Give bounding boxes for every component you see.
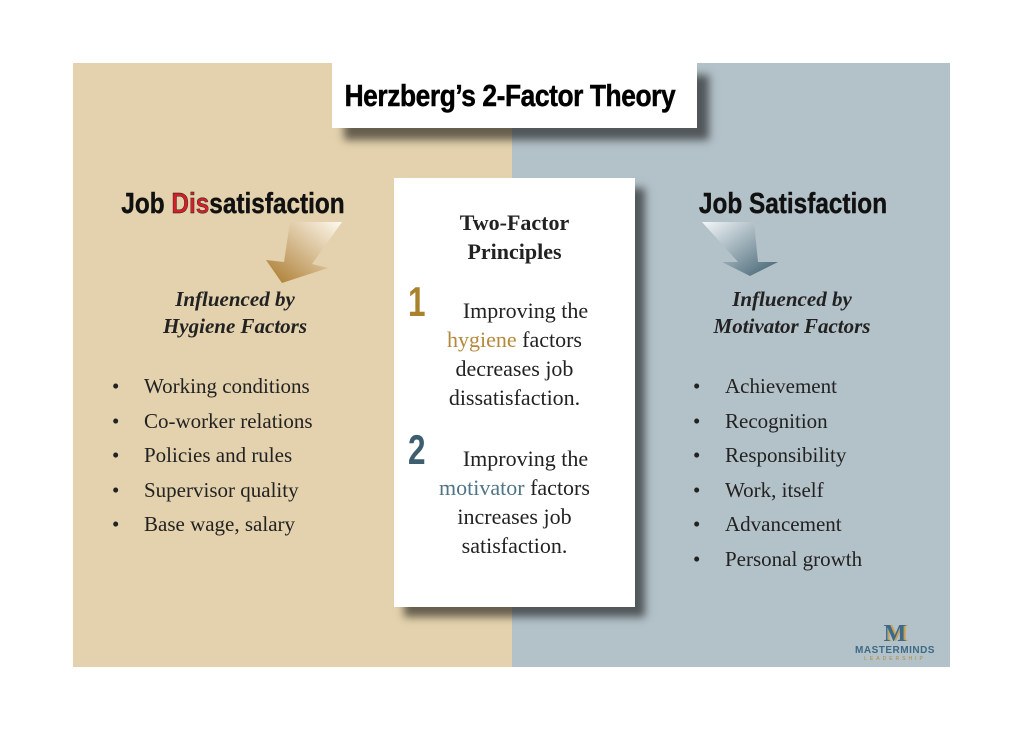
- principle 2: Improving the: [463, 446, 588, 471]
- list: motivator factors: Achievement: [725, 374, 837, 398]
- list: motivator factors: [694, 374, 862, 570]
- logo: masterminds leadership: MASTERMINDS: [855, 645, 935, 656]
- panel: left background: [73, 63, 512, 667]
- principle 1: [408, 278, 588, 410]
- text: influenced by hygiene: Influenced by: [175, 287, 295, 311]
- list: motivator factors: Recognition: [725, 408, 828, 432]
- list: hygiene factors: Co-worker relations: [144, 408, 313, 432]
- title: Herzberg’s 2-Factor Theory: [345, 78, 675, 113]
- text: influenced by motivator: Influenced by: [732, 287, 852, 311]
- principle 1: decreases job: [456, 356, 573, 381]
- text: influenced by motivator: Motivator Factors: [714, 314, 870, 338]
- list: hygiene factors: Policies and rules: [144, 443, 292, 467]
- logo: masterminds leadership: M: [884, 621, 906, 647]
- list: motivator factors: Responsibility: [725, 443, 846, 467]
- list: motivator factors: Advancement: [725, 512, 842, 536]
- panel: right background: [512, 63, 950, 667]
- principle 2: 2: [408, 426, 426, 473]
- list: hygiene factors: Base wage, salary: [144, 512, 295, 536]
- heading: two-factor principles: Principles: [467, 239, 562, 264]
- principle 2: [408, 426, 590, 558]
- title box: [332, 63, 697, 128]
- text: influenced by hygiene: [162, 287, 307, 338]
- principle 2: increases job: [457, 504, 572, 529]
- heading: job satisfaction: Job Satisfaction: [699, 188, 887, 220]
- icon: gold arrow: [266, 222, 342, 283]
- list: motivator factors: Personal growth: [725, 546, 862, 570]
- principle 1: hygiene factors: [447, 327, 582, 352]
- heading: two-factor principles: [460, 210, 569, 264]
- list: motivator factors: Work, itself: [725, 478, 824, 502]
- principle 2: motivator factors: [439, 475, 590, 500]
- heading: two-factor principles: Two-Factor: [460, 210, 569, 235]
- list: hygiene factors: Working conditions: [144, 374, 310, 398]
- principle 1: dissatisfaction.: [449, 385, 580, 410]
- logo: masterminds leadership: [855, 621, 935, 662]
- panel: center principles: [394, 178, 635, 607]
- text: influenced by motivator: [713, 287, 870, 338]
- icon: blue arrow: [702, 222, 778, 276]
- principle 1: Improving the: [463, 298, 588, 323]
- logo: masterminds leadership: LEADERSHIP: [864, 656, 926, 662]
- heading: job dissatisfaction: Job Dissatisfaction: [121, 188, 345, 220]
- principle 2: satisfaction.: [462, 533, 567, 558]
- principle 1: 1: [408, 278, 426, 325]
- list: hygiene factors: Supervisor quality: [144, 478, 299, 502]
- text: influenced by hygiene: Hygiene Factors: [163, 314, 307, 338]
- list: hygiene factors: [113, 374, 313, 536]
